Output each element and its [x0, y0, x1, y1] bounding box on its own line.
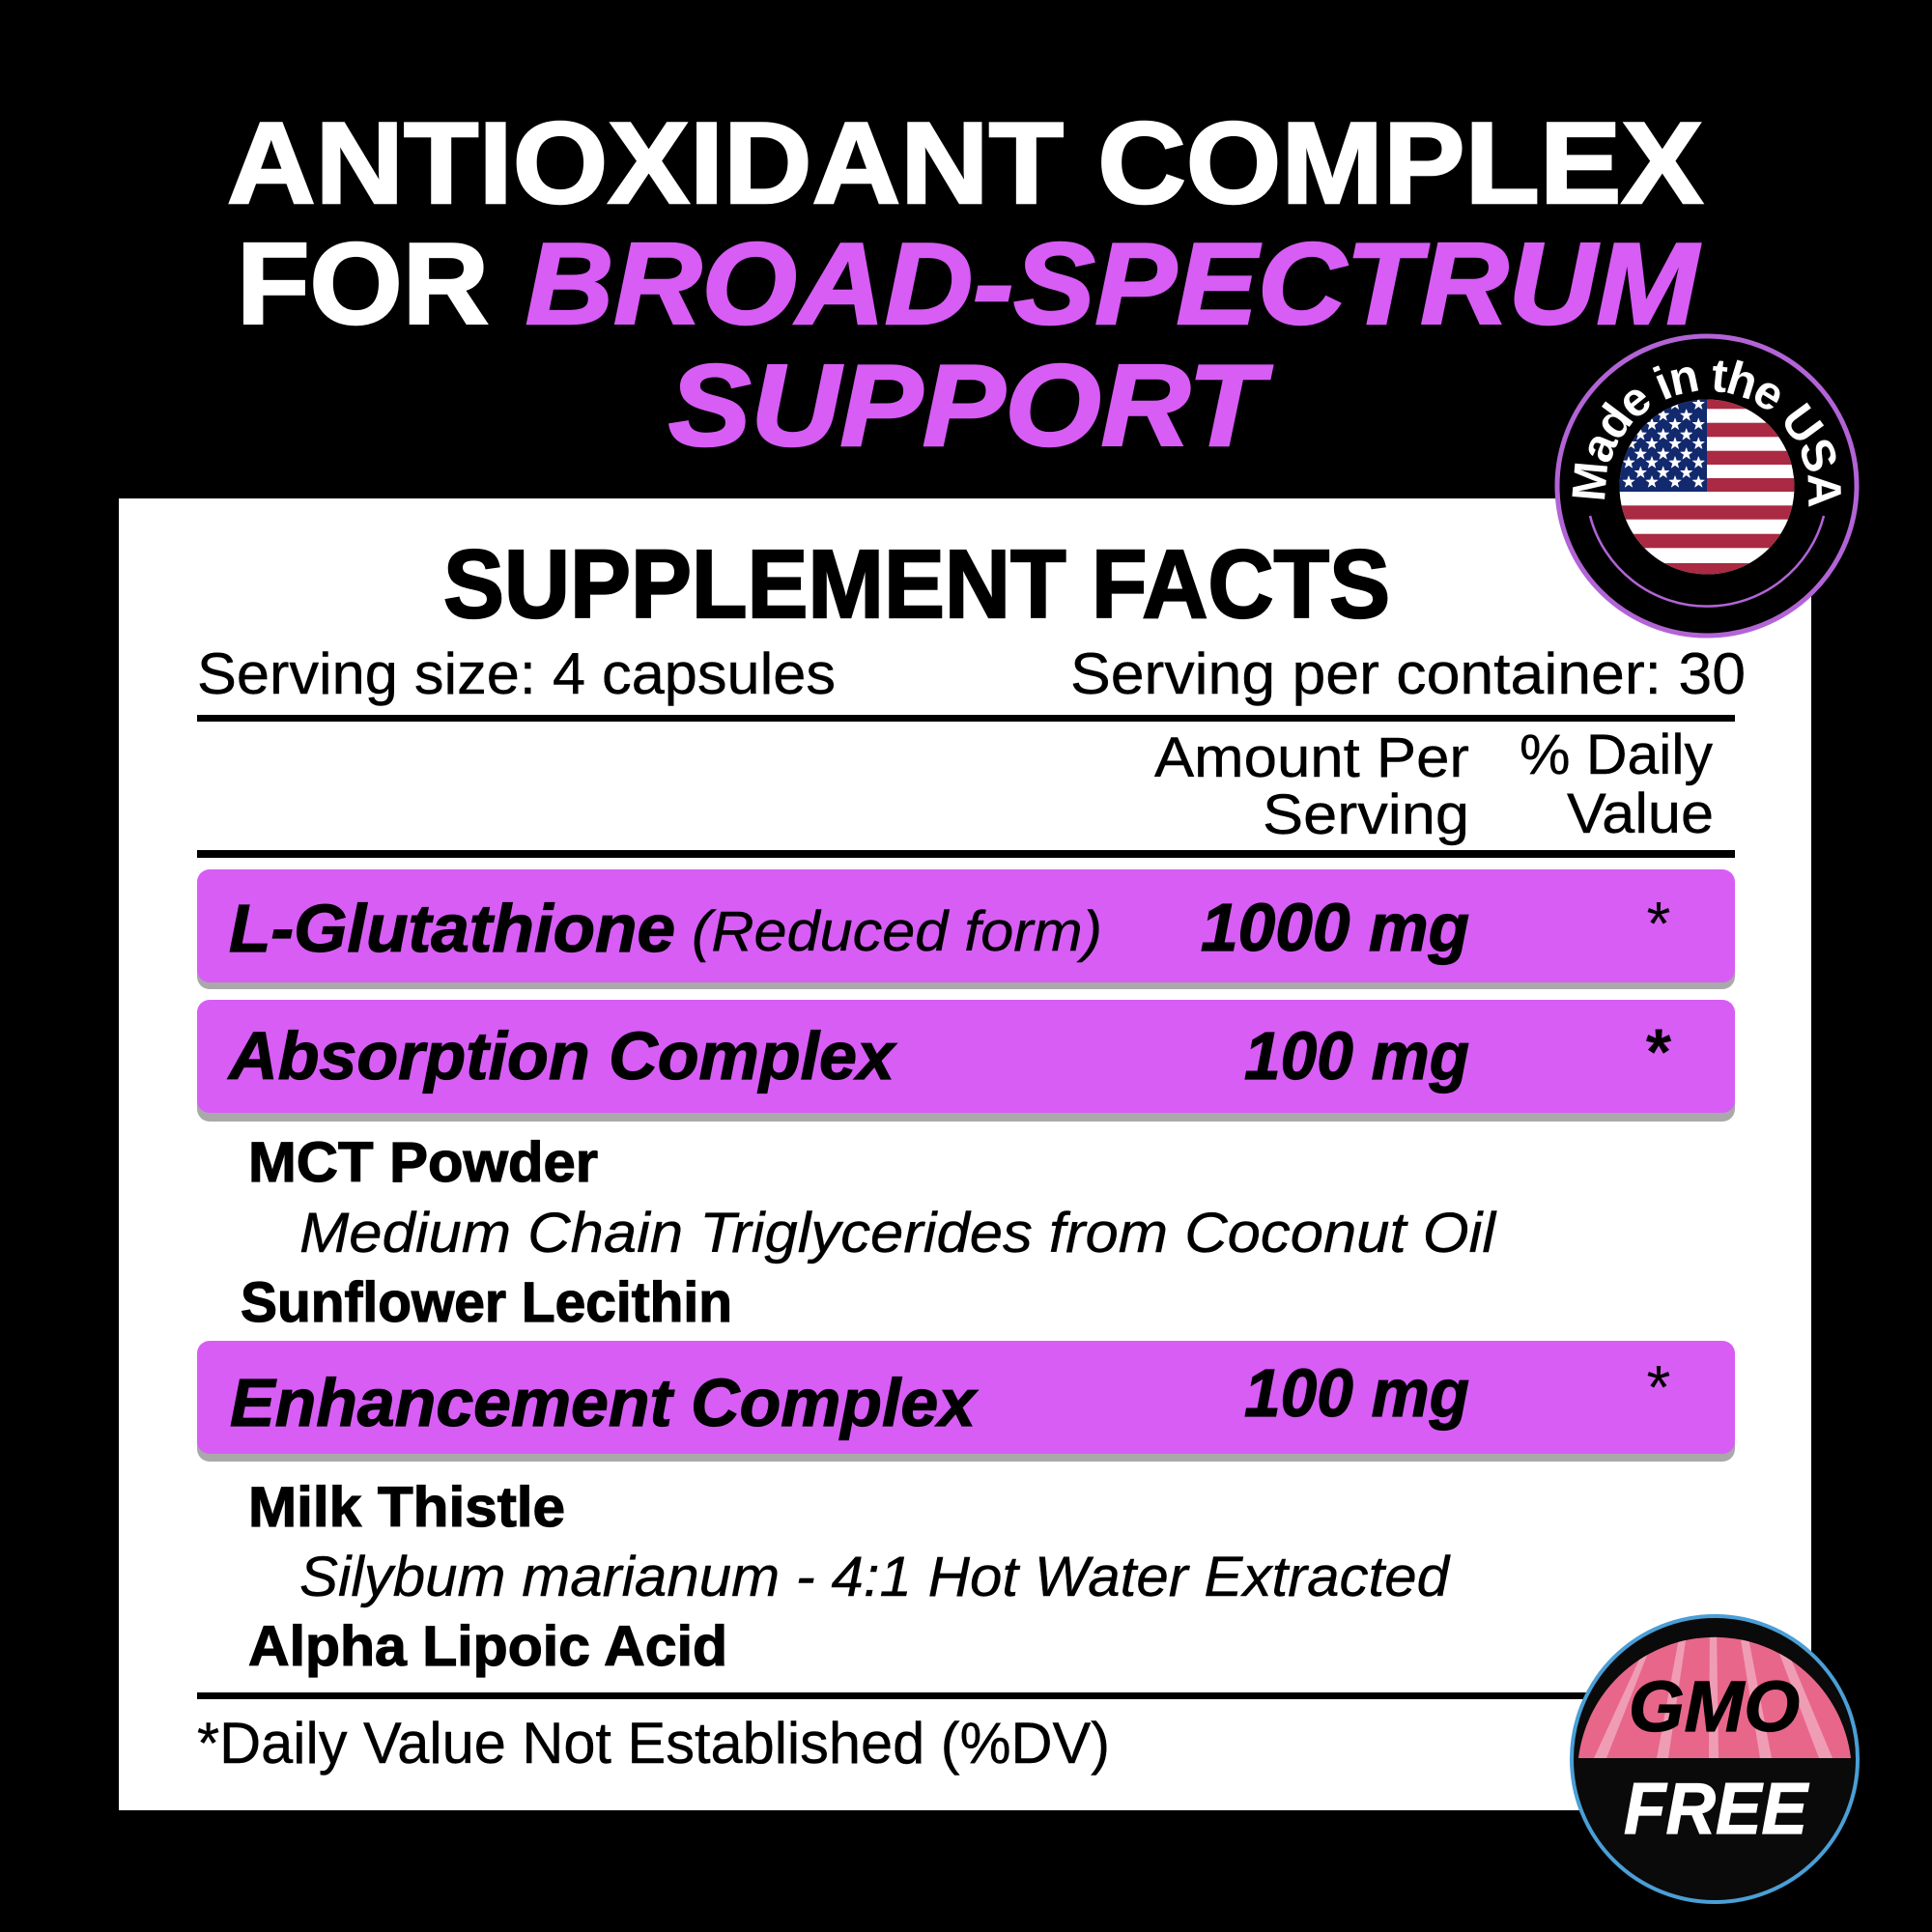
ingredient note: silybum marianum: Silybum marianum - 4:1 Hot Water Extracted — [299, 1546, 1451, 1608]
icon: american flag — [1619, 400, 1795, 574]
heading: supplement facts: SUPPLEMENT FACTS — [443, 530, 1390, 639]
badge: made in the USA — [1555, 334, 1859, 638]
row: Absorption Complex — [197, 1000, 1735, 1122]
row: L-Glutathione: L-Glutathione — [229, 891, 675, 966]
ingredient note: medium chain triglycerides: Medium Chain Triglycerides from Coconut Oil — [299, 1202, 1497, 1264]
row: Enhancement Complex: 100 mg — [1244, 1355, 1469, 1431]
title: FOR — [237, 219, 489, 349]
row: Enhancement Complex: * — [1647, 1352, 1670, 1422]
row: Enhancement Complex — [197, 1341, 1735, 1462]
badge text: FREE: FREE — [1624, 1768, 1809, 1849]
servings per container: Serving per container: 30 — [1070, 641, 1746, 706]
serving size: Serving size: 4 capsules — [197, 641, 836, 706]
row: L-Glutathione: 1000 mg — [1201, 890, 1469, 965]
column header: percent daily value: Value — [1567, 782, 1714, 845]
column header: percent daily value: % Daily — [1520, 724, 1713, 786]
badge text: made in the USA: Made in the USA — [1572, 359, 1841, 507]
title — [227, 99, 1703, 470]
row: L-Glutathione — [197, 869, 1735, 989]
title: BROAD-SPECTRUM — [526, 219, 1701, 349]
badge text: GMO: GMO — [1629, 1666, 1800, 1747]
badge: GMO free — [1570, 1613, 1860, 1902]
footnote: *Daily Value Not Established (%DV) — [197, 1711, 1110, 1776]
title: SUPPORT — [668, 341, 1272, 470]
icon: pink dome with rays — [1578, 1636, 1851, 1758]
ingredient: Sunflower Lecithin: Sunflower Lecithin — [241, 1271, 732, 1334]
column header: percent daily value — [1520, 724, 1714, 845]
row: L-Glutathione: (Reduced form) — [692, 900, 1102, 963]
column header: amount per serving: Serving — [1263, 783, 1469, 846]
row: Absorption Complex: Absorption Complex — [227, 1018, 897, 1094]
panel: supplement facts — [119, 498, 1811, 1810]
ingredient: Milk Thistle: Milk Thistle — [248, 1476, 565, 1539]
row: Absorption Complex: 100 mg — [1244, 1018, 1469, 1094]
column header: amount per serving — [1154, 726, 1469, 846]
row: Enhancement Complex: Enhancement Complex — [230, 1365, 979, 1440]
column header: amount per serving: Amount Per — [1154, 726, 1469, 789]
ingredient: MCT Powder: MCT Powder — [248, 1131, 598, 1194]
title: ANTIOXIDANT COMPLEX — [227, 99, 1703, 228]
row: L-Glutathione: * — [1647, 889, 1670, 958]
row: Absorption Complex: * — [1646, 1015, 1672, 1089]
ingredient: Alpha Lipoic Acid: Alpha Lipoic Acid — [248, 1615, 727, 1678]
